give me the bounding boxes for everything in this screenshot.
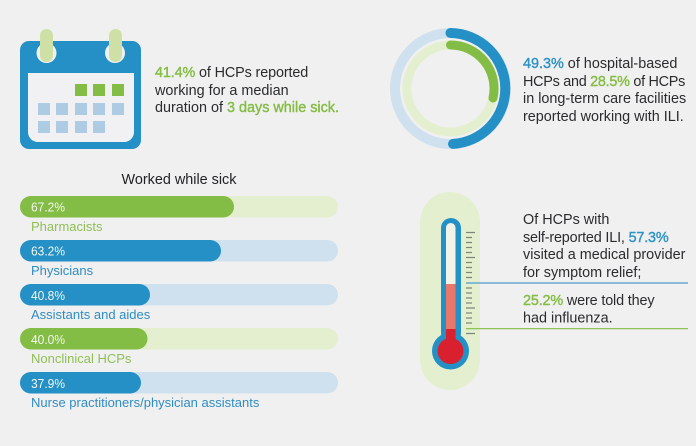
chart: donut rings xyxy=(395,33,506,144)
text: told influenza: 25.2% were told they xyxy=(523,293,654,309)
text: working with ILI: in long-term care facilities xyxy=(523,91,686,107)
bar: nurse practitioners xyxy=(20,372,338,410)
bar: physicians xyxy=(20,240,338,278)
text: told influenza: had influenza. xyxy=(523,310,613,326)
line: green pointer xyxy=(466,328,688,330)
bar: nonclinical HCPs: 40.0% xyxy=(31,332,65,347)
icon: calendar xyxy=(20,29,141,149)
bar: nonclinical HCPs xyxy=(20,328,338,366)
bar: assistants and aides: 40.8% xyxy=(31,288,65,303)
text: medical provider: for symptom relief; xyxy=(523,265,641,281)
text: working with ILI: reported working with ILI. xyxy=(523,109,684,125)
text: working with ILI: HCPs and 28.5% of HCPs xyxy=(523,74,685,90)
bar: nonclinical HCPs: Nonclinical HCPs xyxy=(31,351,132,366)
heading: worked while sick: Worked while sick xyxy=(122,172,237,188)
bar: physicians: 63.2% xyxy=(31,244,65,258)
text: median duration: duration of 3 days while sick. xyxy=(155,100,339,116)
bar: pharmacists: 67.2% xyxy=(31,200,65,214)
bar: pharmacists: Pharmacists xyxy=(31,219,103,234)
text: medical provider: self-reported ILI, 57.3% xyxy=(523,230,669,246)
bar: assistants and aides: Assistants and aides xyxy=(31,307,151,322)
bar: nurse practitioners: 37.9% xyxy=(31,376,65,391)
bar: pharmacists xyxy=(20,196,338,234)
text: medical provider: visited a medical provider xyxy=(523,247,686,263)
line: blue pointer xyxy=(466,282,688,284)
bar: nurse practitioners: Nurse practitioners/physician assistants xyxy=(31,395,260,410)
icon: thermometer xyxy=(420,192,480,390)
text: median duration: 41.4% of HCPs reported xyxy=(155,65,308,81)
bar chart: worked while sick xyxy=(20,196,338,410)
text: working with ILI: 49.3% of hospital-based xyxy=(523,56,677,72)
bar: assistants and aides xyxy=(20,284,338,322)
text: median duration: working for a median xyxy=(154,83,289,99)
text: medical provider: Of HCPs with xyxy=(523,212,609,228)
bar: physicians: Physicians xyxy=(31,263,94,278)
